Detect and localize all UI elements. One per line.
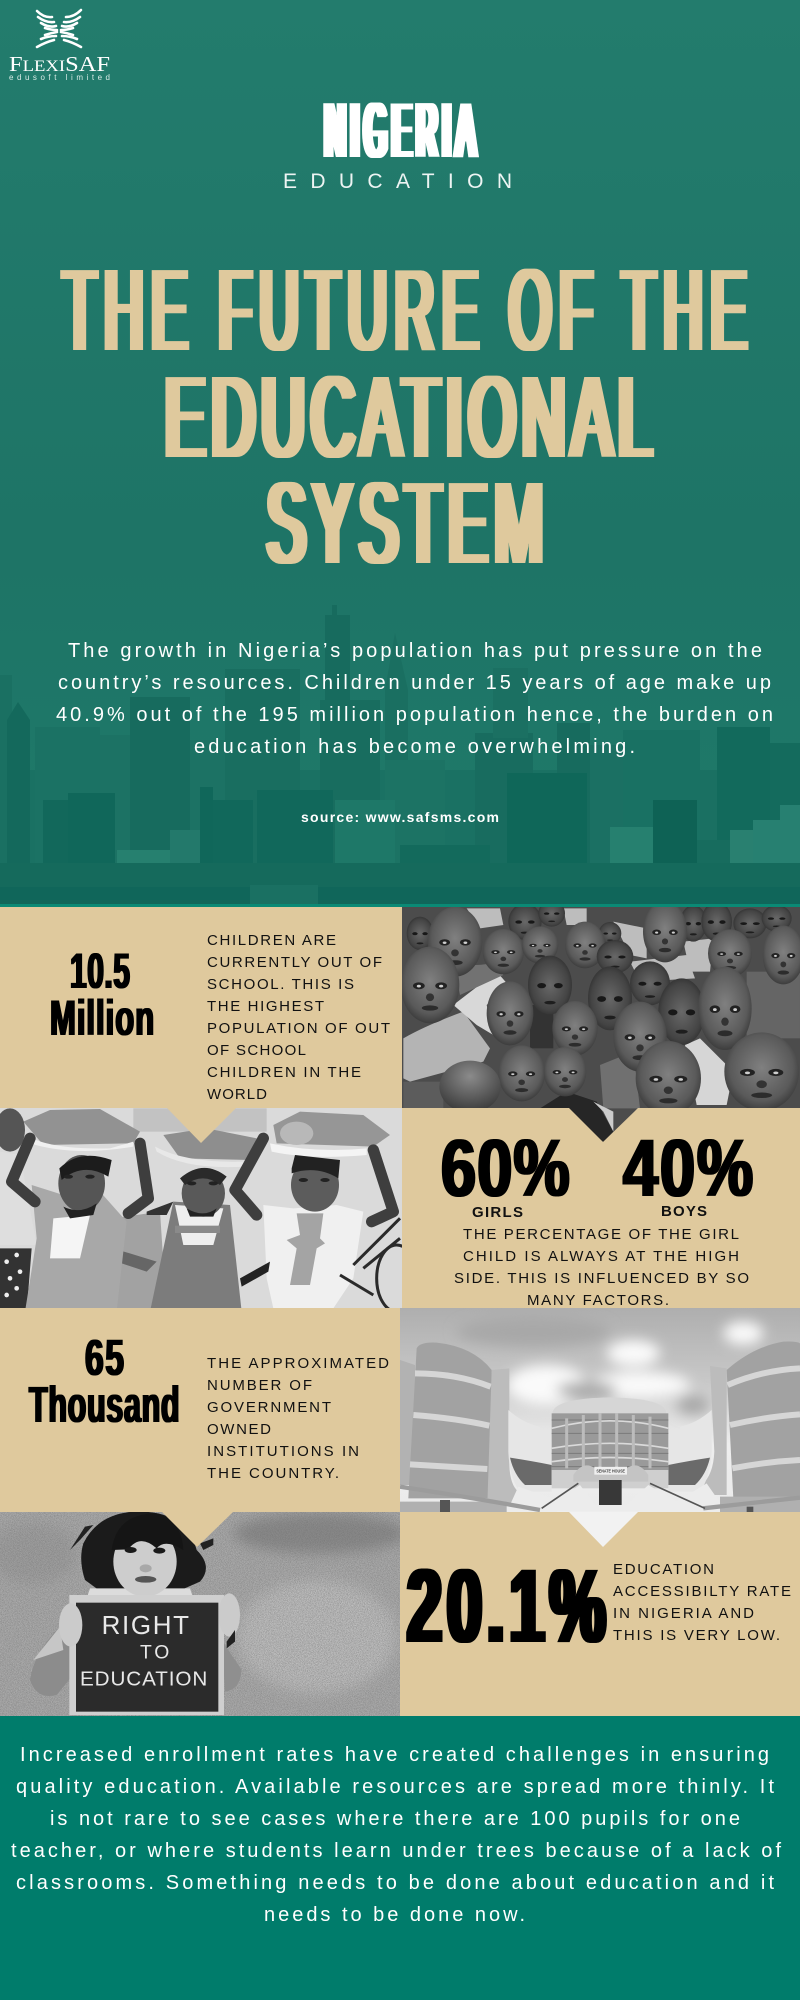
closing paragraph: classrooms. Something needs to be done about education and it xyxy=(16,1872,774,1894)
chalk writing: RIGHT xyxy=(102,1610,189,1640)
description: MANY FACTORS. xyxy=(527,1292,669,1309)
closing paragraph: Increased enrollment rates have created challenges in ensuring xyxy=(20,1744,769,1766)
closing paragraph: is not rare to see cases where there are 100 pupils for one xyxy=(50,1808,740,1830)
description: ACCESSIBILTY RATE xyxy=(613,1583,791,1600)
main title xyxy=(63,246,747,588)
description: NUMBER OF xyxy=(207,1377,312,1394)
intro paragraph xyxy=(56,640,773,758)
description: EDUCATION xyxy=(613,1561,714,1578)
description: IN NIGERIA AND xyxy=(613,1605,754,1622)
description: THE PERCENTAGE OF THE GIRL xyxy=(463,1226,739,1243)
stat: 65 Thousand xyxy=(29,1330,180,1433)
closing paragraph: needs to be done now. xyxy=(264,1904,525,1926)
description: OF SCHOOL xyxy=(207,1042,306,1059)
label: girls: GIRLS xyxy=(472,1204,523,1221)
subheading: EDUCATION: EDUCATION xyxy=(283,170,512,193)
description xyxy=(207,932,390,1103)
description: INSTITUTIONS IN xyxy=(207,1443,359,1460)
chalk writing: EDUCATION xyxy=(80,1667,207,1690)
description: SCHOOL. THIS IS xyxy=(207,976,354,993)
intro paragraph: country’s resources. Children under 15 years of age make up xyxy=(58,672,771,694)
chalk writing xyxy=(82,1616,206,1686)
description: CHILD IS ALWAYS AT THE HIGH xyxy=(463,1248,739,1265)
teal divider xyxy=(0,904,800,907)
description: OWNED xyxy=(207,1421,271,1438)
description: GOVERNMENT xyxy=(207,1399,331,1416)
photo: university senate building xyxy=(400,1305,800,1558)
panel: 10.5 million out of school xyxy=(0,907,402,1143)
stat: 20.1 percent: 20.1% xyxy=(407,1549,606,1665)
main title: THE FUTURE OF THE xyxy=(63,246,747,376)
description: CURRENTLY OUT OF xyxy=(207,954,382,971)
description: CHILDREN IN THE xyxy=(207,1064,361,1081)
stat: 10.5 Million: 10.5 xyxy=(70,943,130,999)
logo wordmark: FLEXI SAF xyxy=(9,52,110,76)
description: THE HIGHEST xyxy=(207,998,324,1015)
description: THE COUNTRY. xyxy=(207,1465,339,1482)
photo: girl holding chalkboard xyxy=(0,1510,407,1720)
stat: 65 Thousand: 65 xyxy=(85,1330,124,1387)
label: boys: BOYS xyxy=(661,1203,707,1220)
description: SIDE. THIS IS INFLUENCED BY SO xyxy=(454,1270,749,1287)
description xyxy=(454,1226,749,1309)
closing paragraph: teacher, or where students learn under trees because of a lack of xyxy=(11,1840,781,1862)
description: WORLD xyxy=(207,1086,267,1103)
description: POPULATION OF OUT xyxy=(207,1020,390,1037)
source line: source: www.safsms.com xyxy=(301,809,499,825)
photo: girls carrying loads xyxy=(0,1105,417,1312)
intro paragraph: 40.9% out of the 195 million population hence, the burden on xyxy=(56,704,773,726)
stat: 40 percent: 40% xyxy=(623,1122,753,1214)
panel: 65 thousand institutions xyxy=(0,1308,400,1547)
panel: 60% girls 40% boys xyxy=(402,1108,800,1309)
icon: butterfly wings xyxy=(37,10,81,47)
intro paragraph: The growth in Nigeria’s population has put pressure on the xyxy=(68,640,762,662)
chalk writing: TO xyxy=(140,1643,169,1664)
photo: crowd of children xyxy=(400,900,800,1145)
sign text: SENATE HOUSE xyxy=(596,1468,625,1473)
logo tagline: edusoft limited xyxy=(9,73,110,82)
city skyline backdrop xyxy=(0,605,800,905)
main title: EDUCATIONAL xyxy=(165,352,652,482)
logo: FlexiSAF xyxy=(9,10,110,82)
intro paragraph: education has become overwhelming. xyxy=(194,736,635,758)
stat: 10.5 Million: Million xyxy=(50,989,154,1046)
footer panel xyxy=(0,1716,800,2000)
stat: 60 percent: 60% xyxy=(441,1122,570,1214)
description xyxy=(613,1561,791,1644)
description: THIS IS VERY LOW. xyxy=(613,1627,780,1644)
stat: 65 Thousand: Thousand xyxy=(29,1376,180,1433)
main title: SYSTEM xyxy=(267,459,543,588)
heading: NIGERIA: NIGERIA xyxy=(325,88,475,174)
panel: 20.1% accessibility xyxy=(400,1512,800,1716)
description: CHILDREN ARE xyxy=(207,932,336,949)
closing paragraph: quality education. Available resources are spread more thinly. It xyxy=(16,1776,774,1798)
description: THE APPROXIMATED xyxy=(207,1355,389,1372)
description xyxy=(207,1355,389,1482)
closing paragraph xyxy=(11,1744,781,1926)
header background panel xyxy=(0,0,800,907)
stat: 10.5 Million xyxy=(50,943,154,1046)
